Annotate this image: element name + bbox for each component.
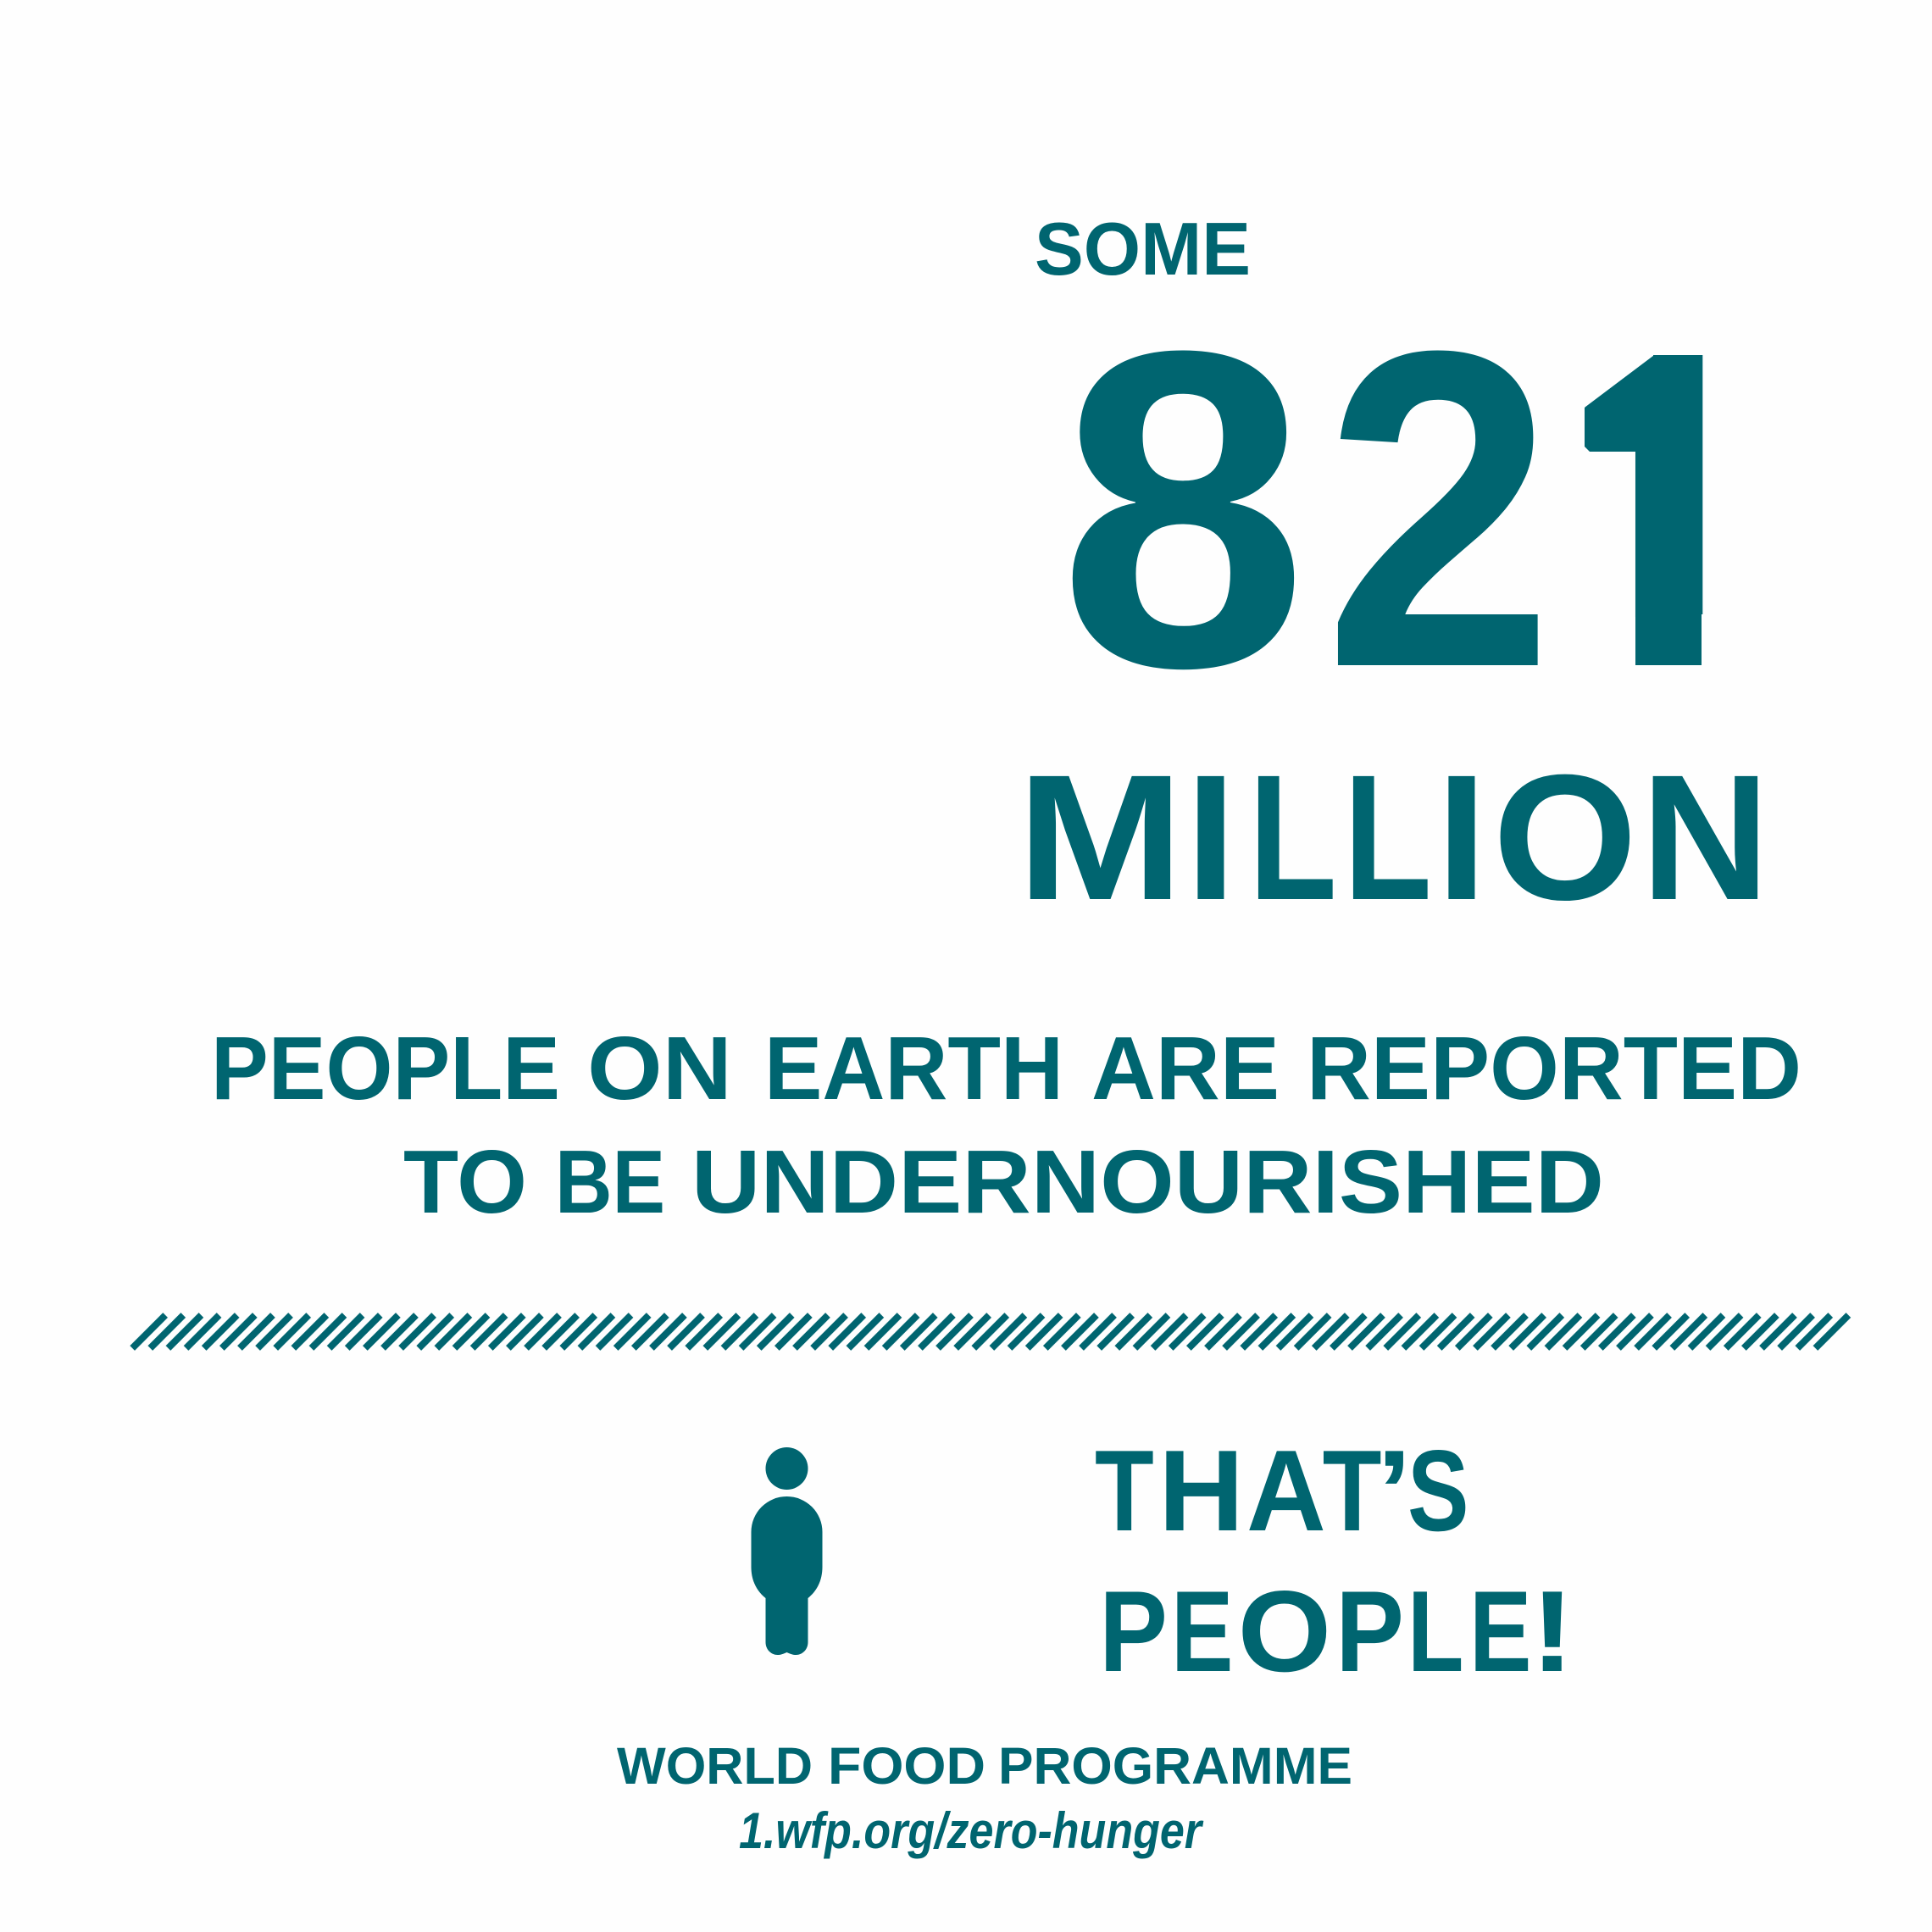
heading: MILLION: L xyxy=(1344,737,1432,937)
big number: 821: 8 xyxy=(1058,258,1307,761)
heading: MILLION: N xyxy=(1641,737,1769,937)
callout: that's people xyxy=(1095,1426,1574,1696)
callout: that's people: T xyxy=(1323,1426,1381,1555)
statement: people on earth are reported to be undernourished: PEOPLE xyxy=(211,1019,560,1119)
statement: people on earth are reported to be undernourished: BE xyxy=(555,1132,665,1232)
heading: SOME: SOME xyxy=(1035,207,1251,291)
source: World Food Programme xyxy=(617,1737,1352,1795)
statement: people on earth are reported to be undernourished: ON xyxy=(587,1019,732,1119)
icon: person xyxy=(751,1447,822,1655)
statement: people on earth are reported to be undernourished: EARTH xyxy=(764,1019,1063,1119)
heading: MILLION: O xyxy=(1493,737,1637,937)
callout: that's people: T xyxy=(1095,1426,1154,1555)
callout: that's people: L xyxy=(1407,1568,1463,1696)
heading: MILLION xyxy=(1017,737,1769,938)
callout: that's people: H xyxy=(1158,1427,1244,1556)
statement: people on earth are reported to be undernourished: UNDERNOURISHED xyxy=(691,1132,1604,1232)
striped divider xyxy=(119,1310,1863,1353)
heading: MILLION: L xyxy=(1249,737,1337,937)
callout: that's people: ’ xyxy=(1376,1427,1412,1555)
source: World Food Programme: FOOD xyxy=(828,1737,985,1795)
statement: people on earth are reported to be undernourished: TO xyxy=(403,1132,527,1232)
callout: that's people: ! xyxy=(1530,1568,1574,1696)
callout: that's people: P xyxy=(1335,1567,1404,1696)
statement: people on earth are reported to be undernourished: REPORTED xyxy=(1307,1019,1802,1119)
big number: 821: 1 xyxy=(1521,257,1794,761)
statement: people on earth are reported to be undernourished xyxy=(211,1019,1802,1232)
heading: MILLION: M xyxy=(1017,738,1184,937)
heading: MILLION: I xyxy=(1185,738,1236,938)
big number: 821: 2 xyxy=(1324,258,1554,761)
statement: people on earth are reported to be undernourished: ARE xyxy=(1091,1019,1280,1119)
callout: that's people: E xyxy=(1171,1568,1233,1696)
callout: that's people: S xyxy=(1407,1428,1469,1556)
callout: that's people: O xyxy=(1238,1568,1331,1696)
callout: that's people: A xyxy=(1246,1427,1326,1556)
heading: MILLION: I xyxy=(1436,738,1487,938)
callout: that's people: P xyxy=(1099,1567,1168,1696)
source: World Food Programme: PROGRAMME xyxy=(998,1737,1352,1795)
callout: that's people: E xyxy=(1469,1568,1531,1696)
source: World Food Programme: WORLD xyxy=(617,1737,813,1795)
source url: 1.wfp.org/zero-hunger xyxy=(739,1802,1204,1859)
big number: 821 xyxy=(1058,257,1794,761)
